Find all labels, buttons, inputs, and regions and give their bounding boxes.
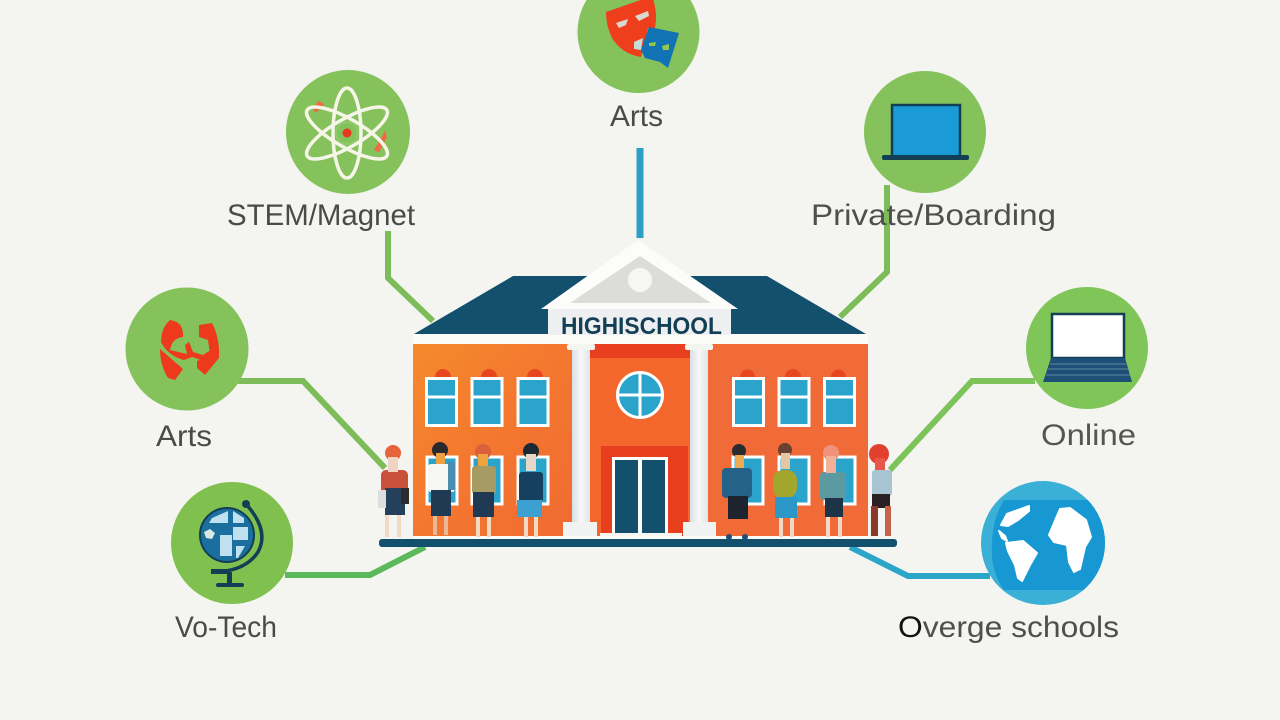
node: Private/Boarding — [811, 71, 1056, 232]
cornice — [413, 334, 868, 344]
icon: atom — [300, 88, 394, 178]
round window — [618, 372, 662, 418]
students group — [378, 442, 892, 540]
label: Arts: Arts — [156, 420, 212, 453]
node: top Arts — [578, 0, 700, 133]
entrance door — [600, 446, 688, 538]
node: Online — [1026, 287, 1148, 452]
wall: centre bay — [590, 344, 690, 537]
student 7 — [820, 445, 846, 537]
student 6 — [773, 443, 797, 537]
icon: blue laptop — [882, 105, 969, 160]
connector: Online to school — [890, 381, 1035, 470]
connector: left Arts to school — [238, 381, 385, 468]
icon: red masks — [160, 320, 219, 380]
icon: laptop — [1043, 314, 1132, 382]
student 5 — [722, 444, 752, 540]
upper windows — [426, 369, 854, 426]
connector: Vo-Tech to school — [285, 547, 425, 575]
icon: theatre masks — [606, 0, 679, 68]
label: Private/Boarding: Private/Boarding — [811, 199, 1056, 232]
label: Vo-Tech: Vo-Tech — [175, 611, 277, 644]
connector: Private/Boarding to school — [840, 185, 887, 317]
wall: right wing — [706, 344, 868, 537]
connector: top Arts to school — [636, 148, 644, 238]
label: Online: Online — [1041, 419, 1136, 452]
icon: desk globe — [200, 500, 262, 587]
student 8 — [869, 444, 892, 536]
icon: world globe — [992, 500, 1105, 590]
student 2 — [428, 442, 455, 535]
student 4 — [517, 443, 543, 537]
sign: HIGH SCHOOL: HIGHISCHOOL — [561, 313, 722, 340]
node: Overseas schools — [898, 481, 1119, 644]
label: Arts: Arts — [610, 100, 663, 133]
node: STEM/Magnet — [227, 70, 416, 232]
pediment — [541, 240, 738, 309]
left column — [563, 344, 597, 538]
base platform — [379, 536, 897, 547]
wall: left wing — [413, 344, 573, 537]
connector: STEM/Magnet to school — [388, 231, 433, 321]
connector: Overseas schools to school — [850, 547, 990, 576]
student 3 — [472, 444, 496, 537]
right column — [683, 344, 716, 538]
label: STEM/Magnet: STEM/Magnet — [227, 199, 416, 232]
lower windows — [427, 457, 855, 504]
node: Vo-Tech — [171, 482, 293, 644]
node: left Arts — [126, 288, 248, 453]
label: Overseas schools: Overge schools — [898, 611, 1119, 644]
roof — [414, 276, 866, 334]
student 1 — [378, 445, 409, 537]
school building — [379, 240, 897, 547]
